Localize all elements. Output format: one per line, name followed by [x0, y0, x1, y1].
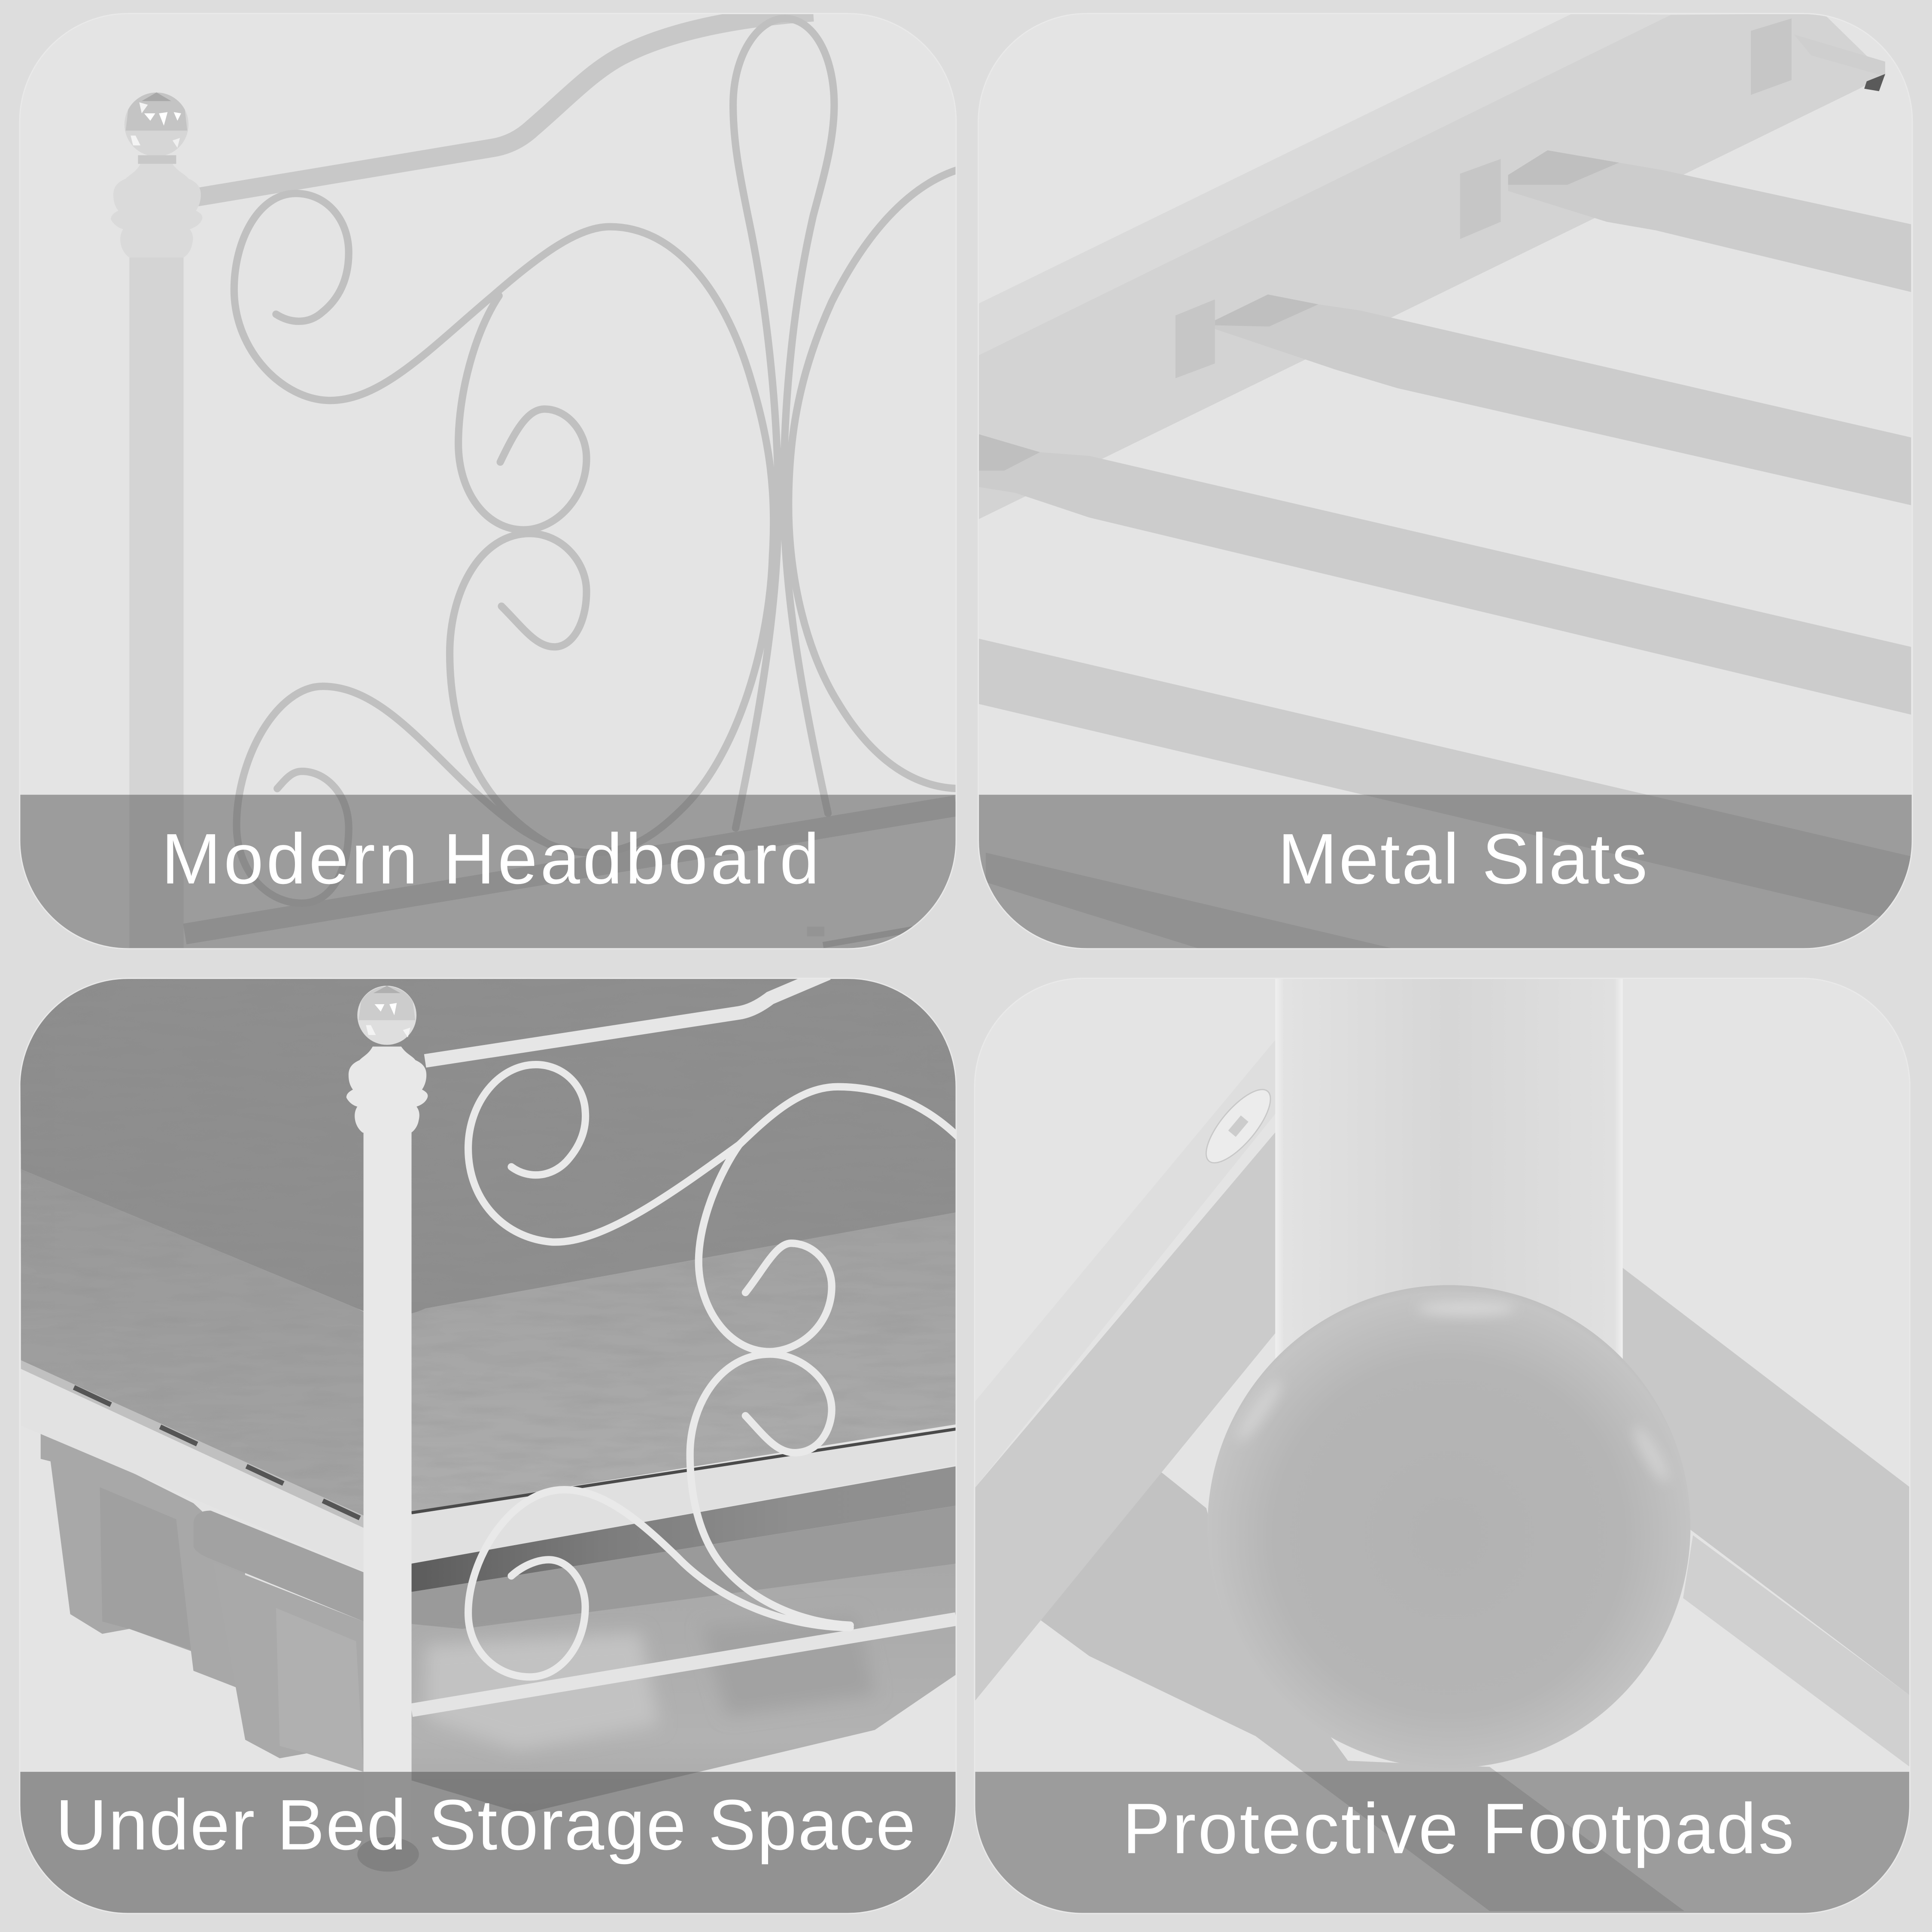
panel: metal slats — [977, 14, 1912, 951]
label: Metal Slats: Metal Slats — [1278, 819, 1647, 899]
top rail — [197, 12, 813, 197]
panel: under bed storage space — [20, 973, 961, 1914]
mattress fabric texture — [20, 978, 956, 1520]
slat rails — [977, 150, 1911, 951]
label band — [20, 1772, 956, 1914]
mattress top — [20, 978, 956, 1317]
flattened slat ends — [977, 150, 1619, 471]
post cap — [111, 164, 202, 258]
rubber footpad — [1207, 1285, 1691, 1768]
right angle tube — [1623, 1268, 1910, 1767]
panel: modern headboard — [20, 12, 961, 955]
label: Modern Headboard: Modern Headboard — [161, 819, 819, 899]
post foot — [357, 1837, 419, 1871]
mattress side — [21, 1170, 956, 1517]
screw washer — [1196, 1080, 1281, 1172]
label: Protective Footpads: Protective Footpads — [1122, 1789, 1794, 1868]
slats under mattress — [21, 1360, 956, 1528]
slat brackets — [1176, 18, 1792, 378]
crystal finial — [357, 986, 416, 1045]
label band — [975, 1772, 1910, 1914]
bottom rail — [185, 806, 956, 934]
vertical leg — [1275, 978, 1623, 1373]
bedpost — [364, 1127, 412, 1854]
rear angle bar — [1033, 1461, 1684, 1911]
storage bins — [41, 1427, 956, 1814]
post cap — [346, 1047, 428, 1133]
crystal finial — [125, 92, 188, 164]
decorative scrollwork — [468, 1065, 961, 1677]
label band — [20, 795, 956, 949]
main side beam — [977, 14, 1885, 520]
top rail — [425, 973, 828, 1061]
panel: protective footpads — [973, 978, 1910, 1914]
label: Under Bed Storage Space: Under Bed Storage Space — [55, 1785, 915, 1865]
bed frame rails — [21, 1369, 956, 1710]
bedpost — [130, 258, 184, 795]
label band — [978, 795, 1912, 949]
decorative scrollwork — [234, 18, 961, 903]
lower side rail and bracket — [807, 922, 956, 945]
far corner rail — [1794, 34, 1885, 91]
left angle beam — [973, 1040, 1275, 1703]
